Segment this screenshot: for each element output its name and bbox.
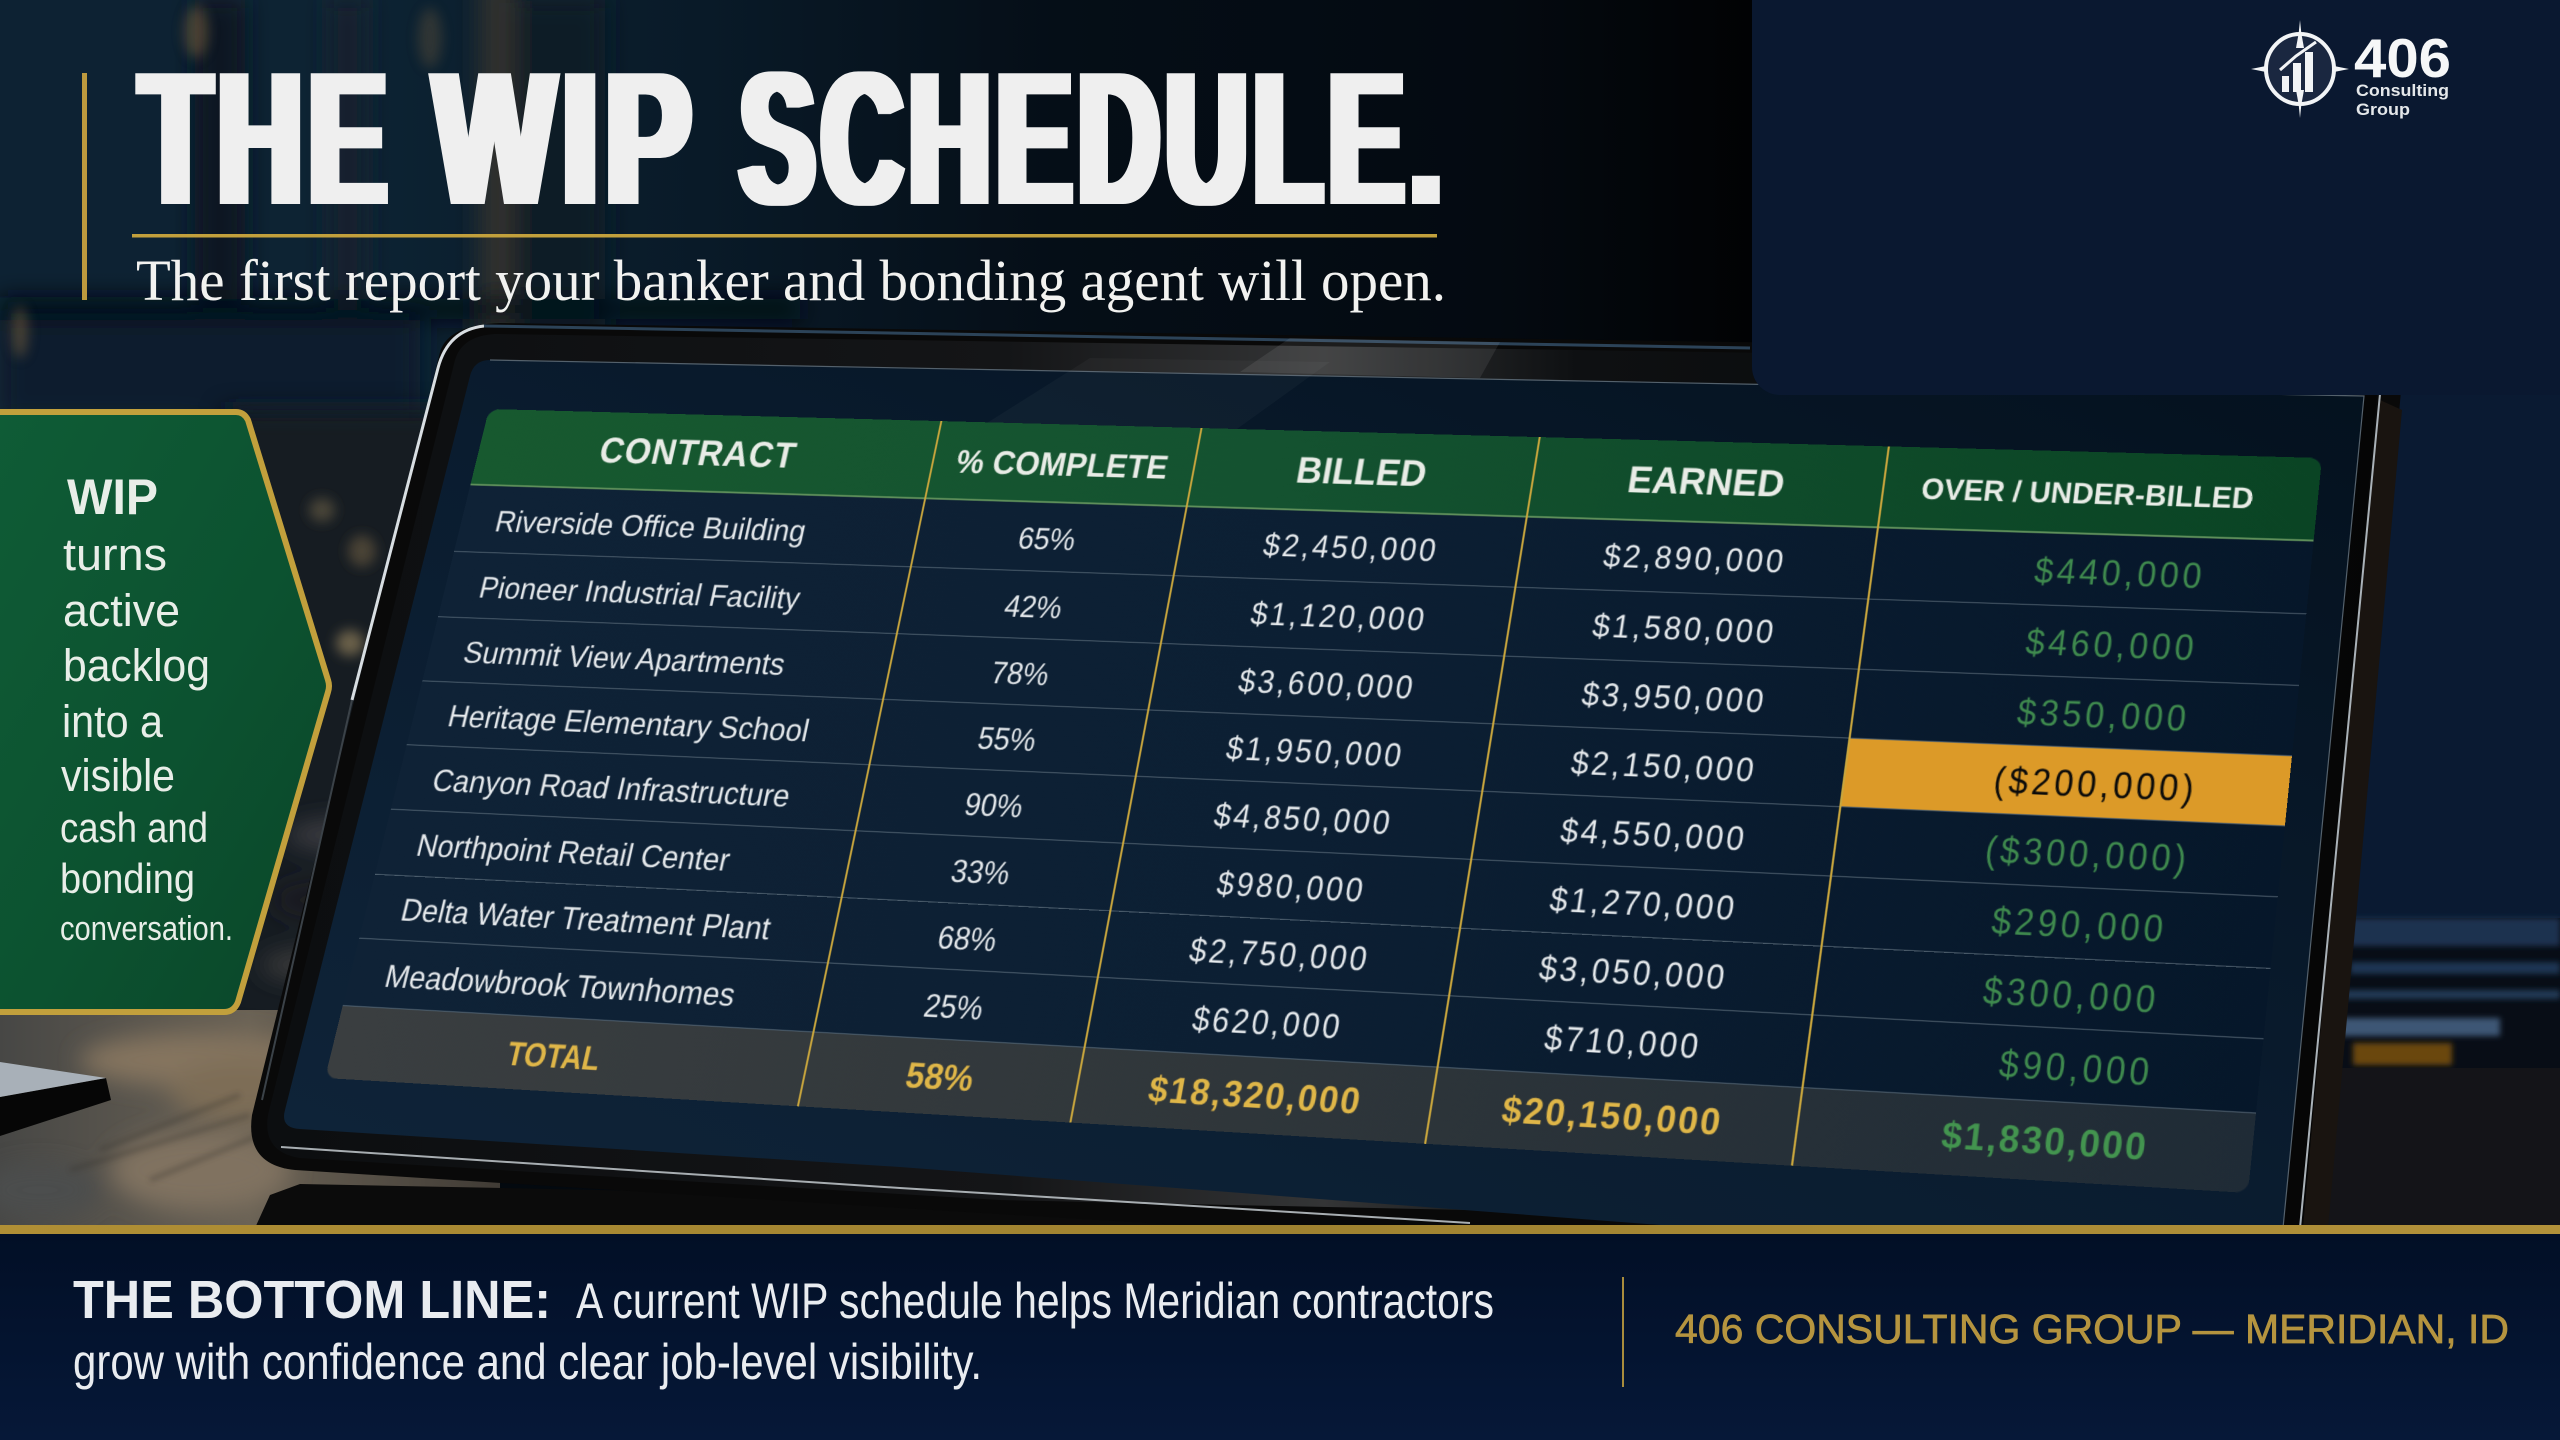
row: Delta Water Treatment Plant: $3,050,000 bbox=[1537, 949, 1730, 997]
row: Summit View Apartments bbox=[422, 617, 2299, 756]
heading bbox=[140, 33, 1448, 245]
row: Delta Water Treatment Plant: $2,750,000 bbox=[1186, 931, 1373, 978]
total row: $18,320,000 bbox=[1145, 1068, 1365, 1122]
row: Summit View Apartments: 78% bbox=[988, 654, 1052, 691]
row: Heritage Elementary School, amber flagged: 55% bbox=[975, 720, 1039, 758]
row: Riverside Office Building: $2,450,000 bbox=[1260, 527, 1441, 569]
row: Riverside Office Building: Riverside Office Building bbox=[492, 504, 810, 547]
row: Pioneer Industrial Facility bbox=[438, 552, 2306, 686]
row: Pioneer Industrial Facility: $1,120,000 bbox=[1248, 596, 1430, 638]
total row: $1,830,000 bbox=[1939, 1113, 2150, 1169]
notebook on desk bbox=[0, 1062, 111, 1136]
firm and location: 406 CONSULTING GROUP — MERIDIAN, ID bbox=[1675, 1306, 2509, 1352]
bottom line text: A current WIP schedule helps Meridian contractors bbox=[576, 1273, 1494, 1329]
tablet shadow on desk bbox=[255, 1184, 1770, 1228]
row: Northpoint Retail Center bbox=[375, 810, 2278, 969]
row: Summit View Apartments: $350,000 bbox=[2015, 691, 2192, 739]
row: Riverside Office Building bbox=[454, 485, 2314, 614]
row: Heritage Elementary School, amber flagged bbox=[407, 681, 2292, 826]
row: Delta Water Treatment Plant bbox=[359, 875, 2271, 1039]
callout: WIP green arrow panel: WIP bbox=[67, 469, 158, 525]
callout: WIP green arrow panel: turns bbox=[63, 529, 167, 580]
callout: WIP green arrow panel: backlog bbox=[63, 640, 210, 691]
row: Heritage Elementary School, amber flagged: $1,950,000 bbox=[1223, 730, 1407, 774]
row: Pioneer Industrial Facility: $1,580,000 bbox=[1590, 608, 1779, 651]
row: Delta Water Treatment Plant: Delta Water Treatment Plant bbox=[397, 892, 774, 946]
logo: 406 Consulting Group: Group bbox=[2356, 100, 2410, 119]
row: Northpoint Retail Center: 33% bbox=[948, 852, 1013, 891]
row: Meadowbrook Townhomes: $90,000 bbox=[1997, 1042, 2155, 1093]
table header row: OVER / UNDER-BILLED bbox=[1919, 472, 2256, 515]
heading: WIP bbox=[434, 33, 699, 245]
row: Heritage Elementary School, amber flagged: $2,150,000 bbox=[1569, 744, 1759, 789]
row: Canyon Road Infrastructure: $4,850,000 bbox=[1211, 796, 1396, 842]
table header row: EARNED bbox=[1625, 459, 1787, 505]
callout: WIP green arrow panel: cash and bbox=[60, 804, 208, 851]
row: Meadowbrook Townhomes: 25% bbox=[921, 986, 987, 1026]
row: Canyon Road Infrastructure: $4,550,000 bbox=[1558, 812, 1750, 858]
row: Northpoint Retail Center: Northpoint Retail Center bbox=[413, 827, 733, 878]
bottom line text bbox=[73, 1270, 1494, 1390]
row: Northpoint Retail Center: $980,000 bbox=[1214, 865, 1369, 909]
table header row: BILLED bbox=[1293, 450, 1430, 495]
total row: 58% bbox=[902, 1054, 977, 1099]
row: Pioneer Industrial Facility: 42% bbox=[1002, 588, 1065, 624]
logo: 406 Consulting Group: Consulting bbox=[2356, 81, 2449, 100]
table header row: % COMPLETE bbox=[953, 442, 1172, 486]
subtitle: The first report your banker and bonding agent will open. bbox=[136, 248, 1446, 313]
WIP schedule table on tablet screen bbox=[325, 409, 2322, 1193]
row: Meadowbrook Townhomes: Meadowbrook Townhomes bbox=[382, 957, 739, 1012]
row: Delta Water Treatment Plant: $300,000 bbox=[1981, 969, 2161, 1021]
row: Summit View Apartments: $3,600,000 bbox=[1236, 663, 1418, 706]
row: Summit View Apartments: Summit View Apartments bbox=[460, 634, 789, 681]
row: Riverside Office Building: $440,000 bbox=[2032, 550, 2207, 596]
callout: WIP green arrow panel: active bbox=[63, 585, 180, 636]
row: Heritage Elementary School, amber flagged: ($200,000) bbox=[1992, 760, 2200, 809]
row: Canyon Road Infrastructure bbox=[391, 745, 2285, 897]
right side wall behind tablet bbox=[2350, 380, 2560, 940]
row: Northpoint Retail Center: $1,270,000 bbox=[1547, 880, 1740, 927]
row: Delta Water Treatment Plant: 68% bbox=[935, 919, 1000, 958]
row: Canyon Road Infrastructure: Canyon Road Infrastructure bbox=[429, 763, 794, 814]
heading: SCHEDULE. bbox=[740, 33, 1448, 245]
callout: WIP green arrow panel: conversation. bbox=[60, 910, 233, 948]
bottom line text: THE BOTTOM LINE: bbox=[73, 1270, 551, 1330]
desk bbox=[0, 1010, 500, 1230]
table header row bbox=[470, 409, 2322, 542]
row: Riverside Office Building: $2,890,000 bbox=[1601, 538, 1789, 580]
row: Canyon Road Infrastructure: 90% bbox=[961, 786, 1026, 824]
total row: $20,150,000 bbox=[1499, 1088, 1725, 1143]
row: Meadowbrook Townhomes: $620,000 bbox=[1189, 1000, 1345, 1047]
total row bbox=[325, 1006, 2256, 1193]
row: Summit View Apartments: $3,950,000 bbox=[1579, 676, 1769, 720]
row: Pioneer Industrial Facility: $460,000 bbox=[2024, 621, 2200, 668]
heading: THE bbox=[140, 33, 393, 245]
row: Pioneer Industrial Facility: Pioneer Industrial Facility bbox=[476, 570, 804, 615]
row: Canyon Road Infrastructure: ($300,000) bbox=[1983, 829, 2192, 880]
logo: 406 Consulting Group: 406 bbox=[2354, 27, 2451, 89]
total row: TOTAL bbox=[503, 1035, 604, 1078]
row: Riverside Office Building: 65% bbox=[1015, 520, 1079, 556]
column dividers bbox=[796, 421, 1890, 1166]
row: Northpoint Retail Center: $290,000 bbox=[1989, 900, 2169, 950]
row: Meadowbrook Townhomes: $710,000 bbox=[1542, 1019, 1704, 1067]
table header row: CONTRACT bbox=[595, 431, 800, 476]
row: Meadowbrook Townhomes bbox=[343, 939, 2263, 1114]
callout: WIP green arrow panel: bonding bbox=[60, 855, 195, 902]
callout: WIP green arrow panel: visible bbox=[61, 750, 175, 801]
bottom line text: grow with confidence and clear job-level visibility. bbox=[73, 1334, 982, 1390]
row: Heritage Elementary School, amber flagged: Heritage Elementary School bbox=[445, 698, 813, 748]
panel: navy top-right logo panel bbox=[1752, 0, 2560, 395]
callout: WIP green arrow panel: into a bbox=[62, 696, 164, 747]
